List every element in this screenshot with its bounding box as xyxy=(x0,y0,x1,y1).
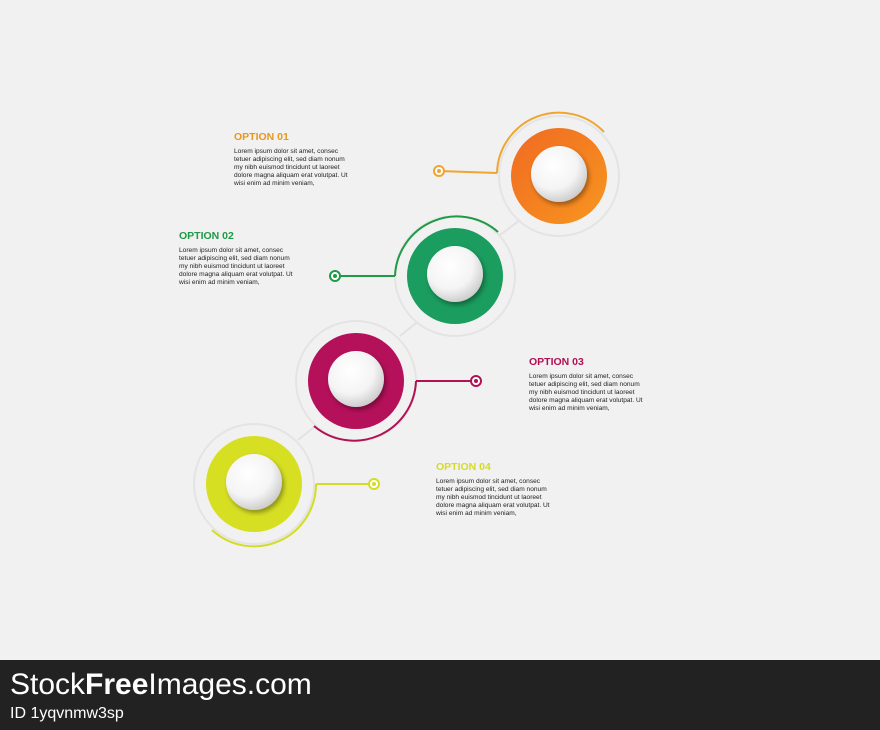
text: option 02: wisi enim ad minim veniam, xyxy=(179,279,260,286)
footer: ID 1yqvnmw3sp xyxy=(10,705,124,722)
footer xyxy=(0,660,880,730)
text: option 01 xyxy=(234,131,348,187)
text: option 04: wisi enim ad minim veniam, xyxy=(436,510,517,517)
text: option 01: my nibh euismod tincidunt ut laoreet xyxy=(234,164,340,171)
text: option 01: dolore magna aliquam erat volutpat. Ut xyxy=(234,172,348,179)
text: option 01: tetuer adipiscing elit, sed diam nonum xyxy=(234,156,345,163)
text: option 01: wisi enim ad minim veniam, xyxy=(234,180,315,187)
text: option 03: Lorem ipsum dolor sit amet, consec xyxy=(529,373,633,380)
text: option 03: my nibh euismod tincidunt ut laoreet xyxy=(529,389,635,396)
text: option 02: my nibh euismod tincidunt ut laoreet xyxy=(179,263,285,270)
text: option 04: tetuer adipiscing elit, sed diam nonum xyxy=(436,486,547,493)
step 3 magenta xyxy=(296,321,481,441)
step 4 yellow xyxy=(194,424,379,546)
text: option 04: OPTION 04 xyxy=(436,461,491,473)
text: option 04: Lorem ipsum dolor sit amet, consec xyxy=(436,478,540,485)
text: option 02: OPTION 02 xyxy=(179,230,234,242)
connectors xyxy=(298,220,520,440)
text: option 02: tetuer adipiscing elit, sed diam nonum xyxy=(179,255,290,262)
text: option 03 xyxy=(529,356,643,412)
text: option 02: Lorem ipsum dolor sit amet, consec xyxy=(179,247,283,254)
step 2 green xyxy=(330,216,515,336)
text: option 03: wisi enim ad minim veniam, xyxy=(529,405,610,412)
text: option 04 xyxy=(436,461,550,517)
footer: StockFreeImages.com xyxy=(10,668,312,701)
text: option 01: OPTION 01 xyxy=(234,131,289,143)
text: option 03: OPTION 03 xyxy=(529,356,584,368)
text: option 03: tetuer adipiscing elit, sed diam nonum xyxy=(529,381,640,388)
text: option 04: my nibh euismod tincidunt ut laoreet xyxy=(436,494,542,501)
step 1 orange xyxy=(434,113,619,236)
text: option 01: Lorem ipsum dolor sit amet, consec xyxy=(234,148,338,155)
text: option 02: dolore magna aliquam erat volutpat. Ut xyxy=(179,271,293,278)
text: option 02 xyxy=(179,230,293,286)
text: option 04: dolore magna aliquam erat volutpat. Ut xyxy=(436,502,550,509)
text: option 03: dolore magna aliquam erat volutpat. Ut xyxy=(529,397,643,404)
